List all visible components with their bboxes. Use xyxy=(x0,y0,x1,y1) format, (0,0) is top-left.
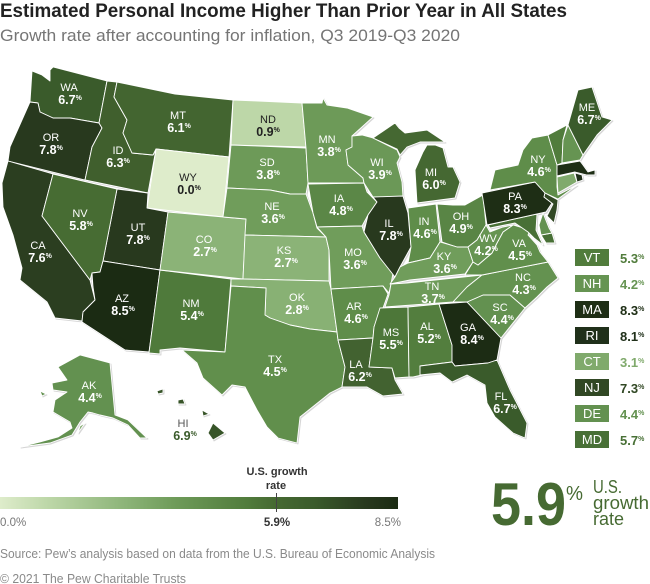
label: MO: MO xyxy=(344,247,362,259)
label: NC: % xyxy=(530,285,537,292)
label: AK: % xyxy=(96,393,103,400)
label: AR: 4.6 xyxy=(344,312,362,326)
label: IN: IN xyxy=(418,216,430,228)
label: TX xyxy=(263,354,288,379)
label: OK xyxy=(285,292,310,317)
state: MI upper xyxy=(373,123,445,155)
label: KY xyxy=(433,251,458,276)
label: LA: % xyxy=(366,372,373,379)
label: WY: WY xyxy=(179,172,198,184)
legend: NH xyxy=(575,275,645,292)
legend: MD xyxy=(575,431,645,448)
label: LA xyxy=(348,359,373,384)
label: TX: TX xyxy=(268,354,283,366)
legend: RI xyxy=(575,327,645,344)
state: FL xyxy=(420,360,527,438)
label: MS: % xyxy=(397,340,404,347)
scale maximum: 8.5% xyxy=(375,517,401,529)
state: AR xyxy=(331,286,388,340)
label: KY: % xyxy=(451,264,458,271)
label: GA: % xyxy=(478,335,485,342)
label: OK: OK xyxy=(289,292,306,304)
state: NM xyxy=(149,270,231,354)
state: UT xyxy=(103,189,168,270)
label: SC: 4.4 xyxy=(490,313,508,327)
label: IN: % xyxy=(431,229,438,236)
legend: MD: 5.7 xyxy=(620,433,638,448)
label: AL xyxy=(417,321,442,346)
state: KS xyxy=(243,235,329,281)
state: MI lower xyxy=(415,145,460,203)
label: VA: 4.5 xyxy=(508,249,526,263)
label: NM: % xyxy=(198,311,205,318)
legend: VT: VT xyxy=(584,250,600,265)
legend: RI: RI xyxy=(586,328,598,343)
state: LA xyxy=(338,338,403,396)
label: CA: CA xyxy=(30,240,46,252)
label: AL: % xyxy=(435,334,442,341)
state: NH xyxy=(562,125,583,163)
label: WV: 4.2 xyxy=(474,244,492,258)
legend: DE: % xyxy=(638,410,645,417)
legend: NJ: % xyxy=(638,384,645,391)
label: PA xyxy=(503,191,528,216)
label: IN xyxy=(413,216,438,241)
MD eastern shore xyxy=(541,233,555,243)
scale minimum: 0.0% xyxy=(0,517,26,529)
state: IA xyxy=(308,183,377,227)
label: IA: 4.8 xyxy=(329,204,347,218)
label: WV: % xyxy=(492,246,499,253)
label: SD: % xyxy=(274,170,281,177)
label: KY: KY xyxy=(437,251,452,263)
big number callout xyxy=(491,471,649,538)
state: AK xyxy=(20,355,147,447)
label: MN: % xyxy=(335,147,342,154)
label: ME xyxy=(577,102,602,127)
caption line 1: U.S. xyxy=(593,477,622,497)
label: GA xyxy=(460,322,485,347)
source: Source: Pew’s analysis based on data from the U.S. Bureau of Economic Analysis xyxy=(0,547,435,561)
label: WA: WA xyxy=(60,82,78,94)
label: NV: 5.8 xyxy=(69,219,87,233)
label: SC xyxy=(490,302,515,327)
label: AK: 4.4 xyxy=(78,391,96,405)
legend: MA: 8.3 xyxy=(620,303,638,318)
label: PA: % xyxy=(521,204,528,211)
label: TN: 3.7 xyxy=(421,292,439,306)
label: TX: % xyxy=(281,367,288,374)
label: NV: % xyxy=(87,221,94,228)
state: SC xyxy=(467,295,525,338)
label: ND: ND xyxy=(260,114,276,126)
label: OR: % xyxy=(57,145,64,152)
label: WA xyxy=(58,82,83,107)
state: CT xyxy=(557,173,577,193)
label: WA: % xyxy=(76,95,83,102)
label: FL: 6.7 xyxy=(493,402,511,416)
label: ID xyxy=(106,145,131,170)
legend: NH: 4.2 xyxy=(620,277,638,292)
label: FL: % xyxy=(511,404,518,411)
legend: MD: MD xyxy=(582,432,602,447)
legend: NH: NH xyxy=(583,276,601,291)
label: ME: 6.7 xyxy=(577,113,595,127)
label: SC: SC xyxy=(492,302,508,314)
subtitle: Growth rate after accounting for inflation, Q3 2019-Q3 2020 xyxy=(0,26,460,45)
state: PA xyxy=(482,182,552,225)
colour scale bar xyxy=(0,466,401,529)
state: MT xyxy=(114,82,233,157)
label: MO: 3.6 xyxy=(343,258,361,272)
legend: RI: 8.1 xyxy=(620,329,638,344)
label: WV xyxy=(474,233,499,258)
state: OK xyxy=(231,279,337,332)
label: HI xyxy=(173,418,198,443)
label: ME: % xyxy=(595,115,602,122)
label: WY: % xyxy=(195,185,202,192)
label: MS: MS xyxy=(383,327,399,339)
label: UT: % xyxy=(144,235,151,242)
caption line 2: growth xyxy=(593,493,649,513)
label: SC: % xyxy=(508,315,515,322)
label: WI: % xyxy=(386,170,393,177)
label: GA: 8.4 xyxy=(460,333,478,347)
label: AZ: AZ xyxy=(115,293,129,305)
label: UT: 7.8 xyxy=(126,233,144,247)
label: CA xyxy=(28,240,53,265)
state: MN xyxy=(302,98,373,183)
label: ND xyxy=(256,114,281,139)
label: NY: 4.6 xyxy=(527,165,545,179)
label: MI: MI xyxy=(425,167,437,179)
state: KY xyxy=(390,242,473,284)
label: NC: NC xyxy=(515,272,531,284)
label: CO: 2.7 xyxy=(193,245,211,259)
state: MA xyxy=(557,161,595,176)
label: OH: OH xyxy=(453,211,469,223)
label: ID: % xyxy=(124,158,131,165)
state value labels xyxy=(28,82,602,443)
label: OK: 2.8 xyxy=(285,303,303,317)
label: SD: SD xyxy=(259,157,275,169)
label: WY xyxy=(177,172,202,197)
label: SD xyxy=(256,157,281,182)
HI, Maui xyxy=(202,410,209,416)
label: AR xyxy=(344,301,369,326)
label: MT: 6.1 xyxy=(167,121,185,135)
label: KS xyxy=(274,245,299,270)
state: NV xyxy=(42,174,117,280)
label: CO: CO xyxy=(196,234,213,246)
label: AZ: % xyxy=(129,306,136,313)
state: WY xyxy=(147,149,229,217)
label: WI xyxy=(368,157,393,182)
Alaska: Bering Sea island xyxy=(40,391,46,396)
legend: MA xyxy=(575,301,645,318)
label: IN: 4.6 xyxy=(413,227,431,241)
label: IL: 7.8 xyxy=(379,229,397,243)
legend: NJ: NJ xyxy=(584,380,600,395)
label: LA: LA xyxy=(349,359,363,371)
label: UT: UT xyxy=(131,222,146,234)
label: UT xyxy=(126,222,151,247)
state: MO xyxy=(317,226,393,293)
state: AL xyxy=(408,304,452,377)
label: MS: 5.5 xyxy=(379,338,397,352)
label: ID: 6.3 xyxy=(106,156,124,170)
label: AZ xyxy=(111,293,136,318)
state: DE xyxy=(539,213,552,235)
label: ME: ME xyxy=(579,102,595,114)
label: NC: 4.3 xyxy=(512,283,530,297)
label: GA: GA xyxy=(460,322,477,334)
label: FL xyxy=(493,391,518,416)
label: TN: TN xyxy=(425,281,439,293)
label: MO xyxy=(343,247,368,272)
label: IA: % xyxy=(347,206,354,213)
legend: DE: DE xyxy=(583,406,601,421)
state: MS xyxy=(369,307,409,378)
label: AR: AR xyxy=(346,301,362,313)
state: CO xyxy=(160,212,246,279)
label: OR xyxy=(39,132,64,157)
legend: CT: % xyxy=(638,358,645,365)
label: ND: % xyxy=(274,127,281,134)
label: KS: % xyxy=(292,258,299,265)
label: NV: NV xyxy=(72,208,88,220)
choropleth map: state shapes xyxy=(2,67,612,447)
state: NY xyxy=(490,135,577,199)
label: MT: % xyxy=(185,123,192,130)
label: NE xyxy=(261,201,286,226)
label: WI: WI xyxy=(370,157,384,169)
HI, Oahu xyxy=(178,399,185,404)
label: CO: % xyxy=(211,247,218,254)
label: AK xyxy=(78,380,103,405)
label: WA: 6.7 xyxy=(58,93,76,107)
label: PA: PA xyxy=(508,191,523,203)
state: AZ xyxy=(82,261,160,352)
label: MT xyxy=(167,110,192,135)
HI, Kauai xyxy=(157,389,163,394)
label: CA: % xyxy=(46,253,53,260)
label: WY: 0.0 xyxy=(177,183,195,197)
legend: MD: % xyxy=(638,436,645,443)
state: TN xyxy=(385,275,482,307)
label: MI: 6.0 xyxy=(422,178,440,192)
label: AR: % xyxy=(362,314,369,321)
label: KY: 3.6 xyxy=(433,262,451,276)
label: TX: 4.5 xyxy=(263,365,281,379)
label: NY: NY xyxy=(530,154,546,166)
label: MS xyxy=(379,327,404,352)
label: PA: 8.3 xyxy=(503,202,521,216)
state: MD xyxy=(488,214,543,245)
label: MN: 3.8 xyxy=(317,145,335,159)
label: AZ: 8.5 xyxy=(111,304,129,318)
scale heading: rate xyxy=(266,480,286,492)
state: WV xyxy=(468,225,513,265)
caption line 3: rate xyxy=(593,509,624,529)
label: AL: AL xyxy=(420,321,434,333)
legend: NH: % xyxy=(638,280,645,287)
state: HI, big island xyxy=(208,423,225,440)
label: NY: % xyxy=(545,167,552,174)
state: CA xyxy=(2,161,95,321)
state: TX xyxy=(182,286,345,443)
label: WV: WV xyxy=(479,233,498,245)
state: VA xyxy=(465,225,548,275)
gradient xyxy=(0,497,398,509)
state: ID xyxy=(85,81,156,193)
label: IL: IL xyxy=(384,218,394,230)
label: CA: 7.6 xyxy=(28,251,46,265)
label: OH: % xyxy=(467,224,474,231)
legend: CT xyxy=(575,353,645,370)
legend: NJ: 7.3 xyxy=(620,381,638,396)
label: IL xyxy=(379,218,404,243)
legend: NJ xyxy=(575,379,645,396)
label: OR: 7.8 xyxy=(39,143,57,157)
state: IL xyxy=(364,196,411,277)
label: LA: 6.2 xyxy=(348,370,366,384)
state: NC xyxy=(453,262,558,308)
state: RI xyxy=(575,173,583,182)
state: NE xyxy=(223,188,326,237)
label: OR: OR xyxy=(43,132,59,144)
state: NJ xyxy=(544,193,558,223)
label: KS: KS xyxy=(277,245,291,257)
scale heading: U.S. growth xyxy=(246,466,308,478)
label: NE: 3.6 xyxy=(261,212,279,226)
label: IA xyxy=(329,193,354,218)
value: 5.9 xyxy=(491,471,566,538)
legend: DE: 4.4 xyxy=(620,407,638,422)
label: MN xyxy=(317,134,342,159)
legend: CT: 3.1 xyxy=(620,355,638,370)
label: OH: 4.9 xyxy=(449,222,467,236)
label: IL: % xyxy=(397,231,404,238)
legend: CT: CT xyxy=(583,354,601,369)
state: IN xyxy=(408,204,440,263)
legend: VT: 5.3 xyxy=(620,251,638,266)
state: WA xyxy=(30,67,107,123)
label: MT: MT xyxy=(170,110,186,122)
label: WI: 3.9 xyxy=(368,168,386,182)
label: HI: 6.9 xyxy=(173,429,191,443)
label: NE: NE xyxy=(264,201,280,213)
label: CO xyxy=(193,234,218,259)
label: NC xyxy=(512,272,537,297)
label: NM xyxy=(180,298,205,323)
state: SD xyxy=(227,145,308,194)
scale US value: 5.9% xyxy=(264,517,290,529)
label: NE: % xyxy=(279,214,286,221)
state: VT xyxy=(548,125,567,165)
label: KS: 2.7 xyxy=(274,256,292,270)
label: NM: NM xyxy=(182,298,200,310)
label: FL: FL xyxy=(495,391,507,403)
label: MN: MN xyxy=(318,134,336,146)
legend: MA: % xyxy=(638,306,645,313)
marker xyxy=(276,493,277,512)
label: ND: 0.9 xyxy=(256,125,274,139)
label: HI: % xyxy=(191,431,198,438)
legend: DE xyxy=(575,405,645,422)
label: VA: % xyxy=(526,251,533,258)
state: ME xyxy=(568,87,612,155)
legend: VT: % xyxy=(638,254,645,261)
percent sign: % xyxy=(566,483,583,505)
label: MI xyxy=(422,167,447,192)
Alaska: Kodiak island xyxy=(78,423,85,433)
state: GA xyxy=(439,302,501,366)
label: HI: HI xyxy=(178,418,188,430)
state: WI xyxy=(346,135,403,197)
state: OH xyxy=(437,195,486,247)
label: NV xyxy=(69,208,94,233)
legend: VT xyxy=(575,249,645,266)
label: OH xyxy=(449,211,474,236)
label: TN xyxy=(421,281,446,306)
label: AL: 5.2 xyxy=(417,332,435,346)
label: ID: ID xyxy=(112,145,124,157)
legend: RI: % xyxy=(638,332,645,339)
label: TN: % xyxy=(439,294,446,301)
label: VA: VA xyxy=(512,238,527,250)
label: SD: 3.8 xyxy=(256,168,274,182)
label: MI: % xyxy=(440,180,447,187)
label: IA: IA xyxy=(334,193,345,205)
small states legend xyxy=(575,249,645,448)
title: Estimated Personal Income Higher Than Prior Year in All States xyxy=(0,1,567,22)
label: VA xyxy=(508,238,533,263)
label: NY xyxy=(527,154,552,179)
label: MO: % xyxy=(361,260,368,267)
legend: MA: MA xyxy=(582,302,602,317)
label: OK: % xyxy=(303,305,310,312)
label: AK: AK xyxy=(82,380,97,392)
state: OR xyxy=(8,102,102,180)
label: NM: 5.4 xyxy=(180,309,198,323)
state: ND xyxy=(231,100,306,147)
